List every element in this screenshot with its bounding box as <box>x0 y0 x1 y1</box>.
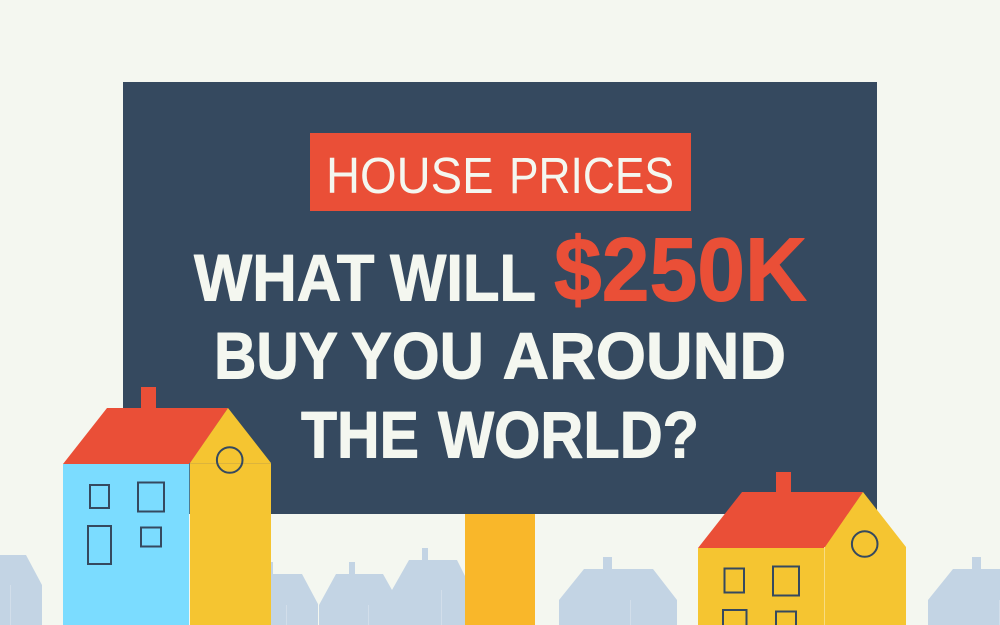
house silhouette: centre <box>392 548 470 625</box>
main title <box>194 220 807 472</box>
title line 2 <box>214 318 786 392</box>
roof <box>63 408 228 464</box>
house silhouette: behind left house <box>260 562 318 625</box>
yellow gable wall <box>190 408 271 625</box>
badge text <box>326 147 674 204</box>
chimney <box>776 472 791 492</box>
front wall <box>698 548 824 625</box>
blue front wall <box>63 464 190 625</box>
house silhouette: centre right <box>559 557 677 625</box>
chimney <box>141 387 156 408</box>
sign board <box>123 82 877 514</box>
badge text: HOUSE <box>326 147 494 204</box>
title line 2: BUY <box>214 318 338 392</box>
title line 3: WORLD? <box>438 398 699 472</box>
title line 1: WILL <box>390 240 536 314</box>
title line 1 <box>194 240 536 314</box>
title line 2: YOU <box>351 318 484 392</box>
title line 3 <box>301 398 699 472</box>
heading badge: house prices <box>310 133 691 211</box>
title line 3: THE <box>301 398 419 472</box>
signpost <box>465 510 535 625</box>
right house: yellow <box>698 472 906 625</box>
windows <box>723 531 878 625</box>
house silhouette: far left <box>0 555 42 625</box>
highlighted amount: $250K <box>554 220 807 320</box>
house silhouette: far right <box>928 557 1000 625</box>
windows <box>88 447 242 564</box>
badge text: PRICES <box>509 147 674 204</box>
house silhouette: centre left <box>319 562 392 625</box>
background skyline houses <box>0 548 1000 625</box>
gable wall <box>825 492 906 625</box>
roof <box>698 492 863 548</box>
title line 2: AROUND <box>502 318 786 392</box>
left house: blue and yellow <box>63 387 271 625</box>
title line 1: WHAT <box>194 240 374 314</box>
